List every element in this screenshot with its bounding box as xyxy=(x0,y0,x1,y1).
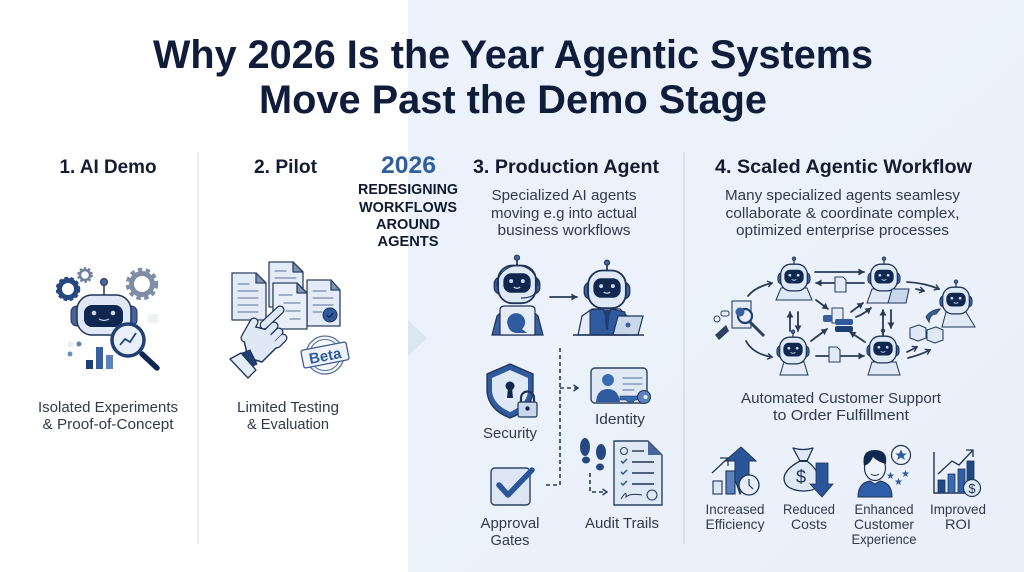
icon: reduced costs: $ xyxy=(796,467,806,487)
heading: 1. AI Demo: 1. AI Demo xyxy=(60,157,156,178)
icon: documents, robot hand and beta stamp: Beta xyxy=(308,345,344,368)
caption: automated customer support: to Order Fulfillment xyxy=(773,407,910,424)
icon: business robot with laptop xyxy=(573,260,644,335)
panel: 4. Scaled Agentic Workflow xyxy=(706,157,986,547)
label: enhanced customer experience: Customer xyxy=(854,517,914,532)
dashed connector lines xyxy=(543,348,607,492)
column dividers xyxy=(198,152,684,544)
caption: automated customer support: Automated Customer Support xyxy=(741,390,942,407)
description: production agent: business workflows xyxy=(498,222,630,239)
icon: enhanced customer experience: ★ xyxy=(886,471,895,482)
label: enhanced customer experience: Enhanced xyxy=(854,502,914,517)
icon: reduced costs xyxy=(784,448,833,497)
icon: audit document xyxy=(614,441,662,505)
description: production agent xyxy=(491,187,637,239)
label: identity: Identity xyxy=(595,411,646,428)
chevron between stages xyxy=(408,320,427,356)
caption: limited testing xyxy=(237,399,339,433)
panel: 1. AI Demo xyxy=(38,157,178,433)
icon: documents, robot hand and beta stamp xyxy=(230,262,349,378)
icon: input document and magnifier xyxy=(714,301,764,340)
label: improved ROI xyxy=(930,502,986,532)
callout: 2026 redesigning workflows around agents: 2026 xyxy=(381,152,436,179)
caption: isolated experiments xyxy=(38,399,178,433)
title xyxy=(153,33,873,122)
icon: approval checkbox xyxy=(491,468,532,505)
description: scaled workflow: collaborate & coordinate complex, xyxy=(726,205,960,222)
icon: passed documents xyxy=(829,277,846,362)
icon: security shield with lock xyxy=(487,364,537,418)
icon: agent robots xyxy=(776,257,975,375)
label: enhanced customer experience: Experience xyxy=(852,532,916,547)
description: scaled workflow xyxy=(725,187,960,239)
title: Why 2026 Is the Year Agentic Systems xyxy=(153,33,873,77)
label: improved ROI: Improved xyxy=(930,502,986,517)
icon: support robot xyxy=(492,255,543,335)
callout: 2026 redesigning workflows around agents: REDESIGNING xyxy=(358,182,458,198)
label: reduced costs: Costs xyxy=(791,517,827,532)
label: approval gates xyxy=(480,515,540,549)
label: increased efficiency: Increased xyxy=(706,502,764,517)
caption: limited testing: Limited Testing xyxy=(237,399,339,416)
icon: improved ROI xyxy=(934,450,980,496)
label: reduced costs: Reduced xyxy=(783,502,835,517)
icon: identity card with key xyxy=(591,368,650,404)
callout: 2026 redesigning workflows around agents: AROUND xyxy=(376,217,440,233)
panel: 3. Production Agent xyxy=(473,157,662,549)
icon: central data stack xyxy=(823,308,853,332)
caption: automated customer support xyxy=(741,390,942,424)
label: audit trails: Audit Trails xyxy=(585,515,659,532)
label: security: Security xyxy=(483,425,537,442)
label: enhanced customer experience xyxy=(852,502,916,547)
label: increased efficiency xyxy=(706,502,765,532)
caption: isolated experiments: Isolated Experiments xyxy=(38,399,178,416)
heading: 3. Production Agent: 3. Production Agent xyxy=(473,157,660,178)
heading: 2. Pilot: 2. Pilot xyxy=(254,157,318,178)
caption: limited testing: & Evaluation xyxy=(247,416,329,433)
callout: 2026 redesigning workflows around agents: AGENTS xyxy=(378,234,439,250)
icon: improved ROI: $ xyxy=(968,481,976,496)
robot hand xyxy=(230,310,283,378)
icon: enhanced customer experience: ★ xyxy=(894,477,903,488)
title: Move Past the Demo Stage xyxy=(259,78,767,122)
label: approval gates: Approval xyxy=(480,515,540,532)
description: production agent: moving e.g into actual xyxy=(491,205,637,222)
label: increased efficiency: Efficiency xyxy=(706,517,765,532)
callout: 2026 redesigning workflows around agents xyxy=(358,152,458,250)
icon: enhanced customer experience xyxy=(858,446,910,497)
diagram: collaborating agents xyxy=(714,257,975,375)
description: scaled workflow: optimized enterprise processes xyxy=(736,222,949,239)
icon: increased efficiency xyxy=(712,447,759,495)
label: approval gates: Gates xyxy=(490,532,530,549)
caption: isolated experiments: & Proof-of-Concept xyxy=(42,416,174,433)
icon: robot with gears and magnifier xyxy=(57,268,158,369)
label: improved ROI: ROI xyxy=(945,517,971,532)
arrows between agents xyxy=(746,272,939,358)
panel: 2. Pilot xyxy=(230,157,349,433)
icon: enhanced customer experience: ★ xyxy=(901,469,910,480)
icon: footprints xyxy=(580,438,606,470)
icon: delivery boxes xyxy=(910,309,943,343)
callout: 2026 redesigning workflows around agents: WORKFLOWS xyxy=(359,200,457,216)
label: reduced costs xyxy=(783,502,835,532)
description: scaled workflow: Many specialized agents seamlesy xyxy=(725,187,960,204)
arrow: support robot to business robot xyxy=(550,296,577,298)
heading: 4. Scaled Agentic Workflow: 4. Scaled Agentic Workflow xyxy=(715,157,972,178)
description: production agent: Specialized AI agents xyxy=(492,187,636,204)
